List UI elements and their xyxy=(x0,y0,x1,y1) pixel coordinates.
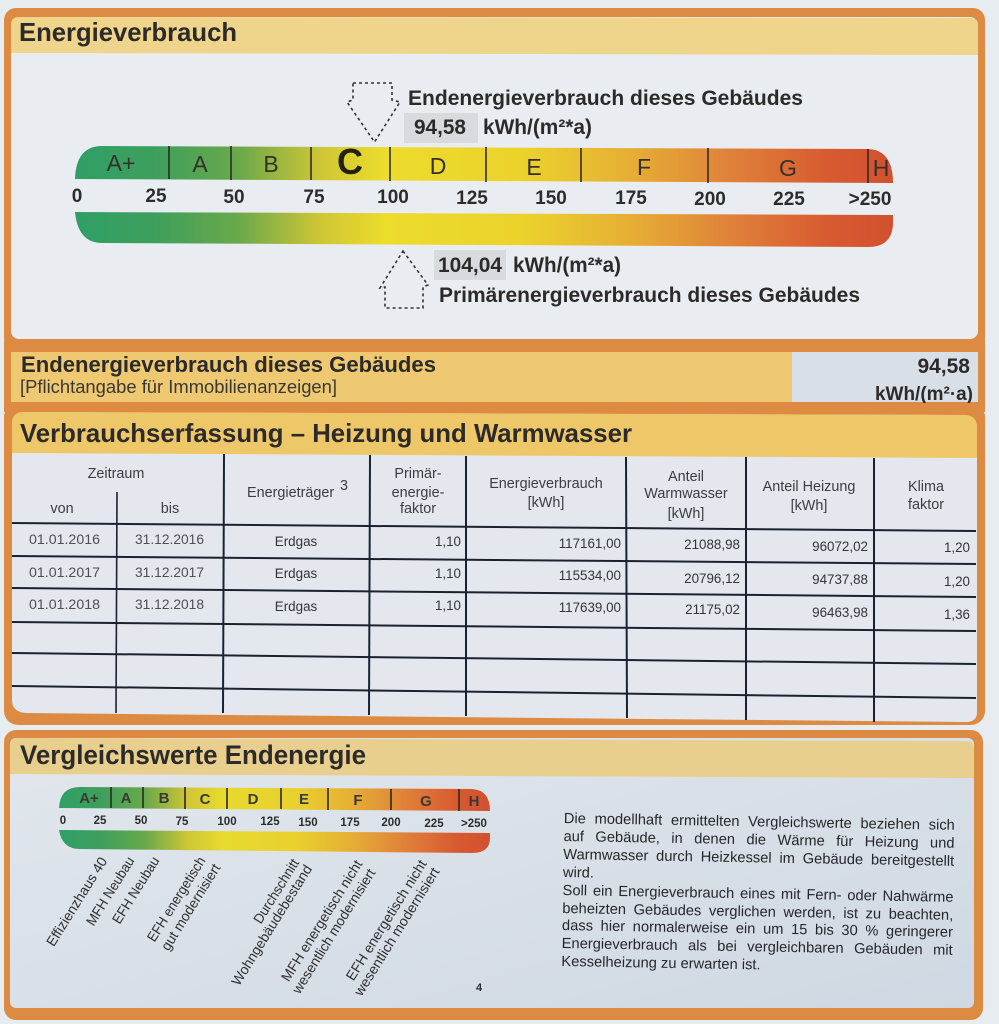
small scale bar: G xyxy=(420,793,432,810)
table row 2018: 1,10 xyxy=(435,598,461,613)
scale bar: classes: G xyxy=(779,155,797,181)
small scale numbers: 175 xyxy=(340,817,360,829)
table header cells: [kWh] xyxy=(791,498,827,514)
small scale bar xyxy=(59,787,490,811)
small scale numbers: 75 xyxy=(176,816,189,828)
scale numbers: 50 xyxy=(223,187,245,208)
small scale bar: A+ xyxy=(79,790,99,807)
table header cells xyxy=(50,466,944,522)
table row 2016: 31.12.2016 xyxy=(135,531,204,547)
table row 2016 xyxy=(29,531,970,555)
rotated building labels: Durchschnitt xyxy=(250,856,302,926)
heading: Verbrauchserfassung: Verbrauchserfassung – Heizung und Warmwasser xyxy=(20,420,632,448)
scale numbers: >250 xyxy=(849,189,891,210)
table row 2017: 31.12.2017 xyxy=(135,564,204,580)
small scale numbers: 225 xyxy=(424,818,444,830)
scale bar: classes: B xyxy=(263,151,279,177)
rotated building labels: wesentlich modernisiert xyxy=(288,866,378,997)
rotated building labels: EFH Neubau xyxy=(109,854,162,926)
table header cells: von xyxy=(50,501,74,517)
table header cells: Warmwasser xyxy=(644,486,728,502)
table row 2018: 117639,00 xyxy=(559,600,621,615)
heading band xyxy=(11,17,978,55)
unit: kWh/(m²·a) xyxy=(875,384,973,405)
text block: explanation of comparison values: Energieverbrauch als bei vergleichbaren Gebäuden mit xyxy=(562,936,953,959)
small scale numbers: 25 xyxy=(94,815,107,827)
table header cells: Energieverbrauch xyxy=(489,476,603,492)
rotated building labels: Wohngebäudebestand xyxy=(228,862,315,988)
small scale numbers: 50 xyxy=(135,815,147,827)
small scale numbers: 0 xyxy=(60,815,66,827)
scale bar: classes: C xyxy=(337,141,363,182)
scale numbers: 200 xyxy=(694,189,726,210)
scale bar: classes xyxy=(75,141,893,183)
page number: 4 xyxy=(476,982,483,994)
table header cells: faktor xyxy=(908,497,944,513)
heading: Energieverbrauch: Energieverbrauch xyxy=(19,19,237,47)
scale bar: classes: F xyxy=(637,154,651,180)
heading: end energy: Endenergieverbrauch dieses Gebäudes xyxy=(21,352,436,377)
small scale numbers: >250 xyxy=(461,818,487,830)
table row 2018: 01.01.2018 xyxy=(29,596,100,612)
table header cells: energie- xyxy=(392,485,445,501)
text block: explanation of comparison values: Soll ein Energieverbrauch eines mit Fern- oder Nahwärme xyxy=(562,883,954,905)
small scale bar: F xyxy=(353,792,363,809)
table header cells: Klima xyxy=(908,479,944,495)
label: end energy: Endenergieverbrauch dieses Gebäudes xyxy=(408,87,803,110)
rotated building labels: MFH Neubau xyxy=(83,854,137,928)
small scale bar: H xyxy=(469,793,479,810)
table row 2016: 21088,98 xyxy=(684,537,740,552)
table header cells: [kWh] xyxy=(528,495,564,511)
rotated building labels: EFH energetisch nicht xyxy=(342,857,430,983)
scale numbers: 175 xyxy=(615,188,647,209)
value: end energy xyxy=(404,113,592,143)
text block: explanation of comparison values: Kesselheizung zu erwarten ist. xyxy=(561,954,761,974)
value: primary energy: 104,04 xyxy=(438,254,502,277)
small scale bar: D xyxy=(248,791,259,808)
note: [Pflichtangabe für Immobilienanzeigen] xyxy=(20,377,337,397)
scale numbers: 0 xyxy=(72,186,82,207)
scale numbers xyxy=(72,186,891,210)
rotated building labels: Effizienzhaus 40 xyxy=(43,854,110,949)
rotated building labels: MFH energetisch nicht xyxy=(278,857,365,984)
label: primary energy: Primärenergieverbrauch dieses Gebäudes xyxy=(439,284,860,307)
heading band xyxy=(10,738,974,778)
value: end energy: kWh/(m²*a) xyxy=(483,116,592,139)
heading: Vergleichswerte: Vergleichswerte Endenergie xyxy=(20,740,366,770)
table row 2018: 96463,98 xyxy=(812,605,868,620)
scale bar: classes: A+ xyxy=(107,150,135,176)
scale numbers: 75 xyxy=(303,187,325,208)
value: 94,58 xyxy=(917,355,970,378)
table header cells: 3 xyxy=(340,478,348,494)
small scale bar: E xyxy=(299,791,309,808)
value: end energy: 94,58 xyxy=(414,116,466,139)
small scale numbers: 125 xyxy=(260,816,280,828)
scale bar: classes: A xyxy=(192,151,208,177)
scale numbers: 25 xyxy=(145,186,167,207)
rotated building labels: EFH energetisch xyxy=(144,854,208,944)
table row 2017 xyxy=(29,564,970,589)
text block: explanation of comparison values: Die modellhaft ermittelten Vergleichswerte beziehen sich xyxy=(564,811,955,834)
table header cells: Anteil xyxy=(668,469,704,485)
table row 2018: 31.12.2018 xyxy=(135,596,204,612)
small scale bar: A xyxy=(121,790,132,807)
small scale numbers xyxy=(60,815,487,830)
arrow: end energy marker xyxy=(347,83,400,142)
table row 2018: Erdgas xyxy=(275,599,318,614)
panel: Verbrauchserfassung xyxy=(4,403,985,725)
value box xyxy=(792,352,978,402)
panel: Vergleichswerte Endenergie xyxy=(4,730,983,1020)
value: primary energy: kWh/(m²*a) xyxy=(513,254,621,277)
scale numbers: 225 xyxy=(773,189,805,210)
table row 2017: 1,20 xyxy=(944,574,970,589)
table header cells: Anteil Heizung xyxy=(763,479,855,495)
table row 2018 xyxy=(29,596,970,622)
rotated building labels: gut modernisiert xyxy=(157,861,224,953)
text block: explanation of comparison values: Warmwasser durch Heizkessel im Gebäude bereitgestellt xyxy=(563,847,954,870)
table header cells: Zeitraum xyxy=(88,466,144,482)
table header cells: Primär- xyxy=(394,466,442,482)
rotated building labels xyxy=(43,854,443,999)
table rules xyxy=(12,454,976,722)
table header cells: Energieträger xyxy=(247,485,334,501)
text block: explanation of comparison values: beheizten Gebäudes verglichen werden, ist zu beachten, xyxy=(562,901,953,923)
panel: Energieverbrauch xyxy=(4,8,985,350)
table header cells: faktor xyxy=(400,501,436,517)
table row 2017: 01.01.2017 xyxy=(29,564,100,580)
rotated building labels: wesentlich modernisiert xyxy=(350,864,443,999)
text block: explanation of comparison values: wird. xyxy=(563,865,594,881)
table row 2016: 1,10 xyxy=(435,534,461,549)
table row 2016: Erdgas xyxy=(275,534,318,549)
table row 2017: 20796,12 xyxy=(684,571,740,586)
text block: explanation of comparison values: dass hier normalerweise ein um 15 bis 30 % geringerer xyxy=(562,918,953,941)
text block: explanation of comparison values: auf Gebäude, in denen die Wärme für Heizung und xyxy=(563,829,955,852)
table row 2017: 115534,00 xyxy=(559,568,621,583)
scale bar: classes: D xyxy=(430,153,446,179)
table row 2016: 117161,00 xyxy=(559,536,621,551)
small scale numbers: 200 xyxy=(381,817,401,829)
scale numbers: 100 xyxy=(377,187,409,208)
table row 2016: 1,20 xyxy=(944,540,970,555)
small scale numbers: 150 xyxy=(298,817,318,829)
table row 2017: 94737,88 xyxy=(812,572,868,587)
table row 2017: 1,10 xyxy=(435,566,461,581)
table xyxy=(12,454,976,722)
table row 2016: 96072,02 xyxy=(812,539,868,554)
table row 2018: 21175,02 xyxy=(685,602,740,617)
text block: explanation of comparison values xyxy=(561,811,955,974)
small gradient bar xyxy=(59,830,490,853)
small scale bar: B xyxy=(159,790,170,807)
scale bar: classes: E xyxy=(526,154,542,180)
scale bar: classes: H xyxy=(873,155,889,181)
small scale numbers: 100 xyxy=(217,816,237,828)
heading band xyxy=(12,412,977,458)
scale numbers: 150 xyxy=(535,188,567,209)
table header cells: [kWh] xyxy=(668,506,704,522)
arrow: primary energy marker xyxy=(380,251,428,308)
table row 2018: 1,36 xyxy=(944,607,970,622)
small scale bar: C xyxy=(200,791,211,808)
table row 2016: 01.01.2016 xyxy=(29,531,100,547)
gradient bar xyxy=(75,212,893,247)
scale numbers: 125 xyxy=(456,188,488,209)
table row 2017: Erdgas xyxy=(275,566,318,581)
table header cells: bis xyxy=(161,501,179,517)
panel: Pflichtangabe xyxy=(4,340,985,412)
value: primary energy xyxy=(434,250,621,280)
